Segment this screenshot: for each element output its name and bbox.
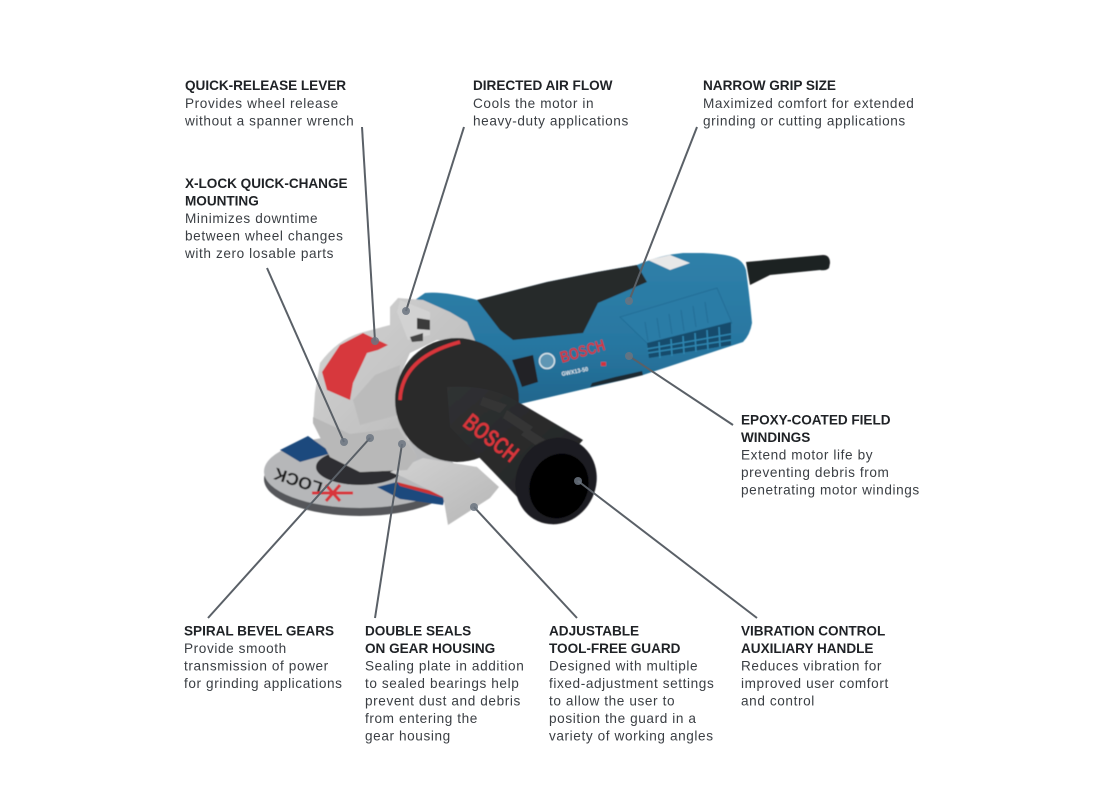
- leader: spiral bevel gears: [208, 438, 370, 618]
- callout: epoxy-coated field windings: Extend motor life by: [741, 448, 873, 462]
- motor housing: [415, 253, 752, 404]
- leader: epoxy windings: [629, 356, 733, 425]
- leader: x-lock: [267, 268, 344, 442]
- rubber grip: [477, 265, 647, 340]
- leader lines: [208, 127, 757, 618]
- callout: directed air flow: DIRECTED AIR FLOW: [473, 78, 613, 93]
- callout: adjustable guard: position the guard in a: [549, 711, 697, 726]
- handle lettering: BOSCH: [458, 409, 523, 468]
- callout: epoxy-coated field windings: preventing debris from: [741, 465, 889, 480]
- auxiliary handle: [395, 338, 611, 538]
- callout: quick-release lever: QUICK-RELEASE LEVER: [185, 78, 346, 93]
- housing logo and model: BOSCH: [558, 337, 607, 367]
- callout: double seals: DOUBLE SEALS: [365, 624, 471, 638]
- callout: narrow grip size: [703, 78, 914, 128]
- callout: spiral bevel gears: for grinding applications: [184, 676, 343, 691]
- leader end dots: [340, 297, 633, 511]
- callout: adjustable guard: variety of working angles: [549, 728, 714, 744]
- callout: x-lock mounting: MOUNTING: [185, 194, 259, 208]
- callout: narrow grip size: grinding or cutting applications: [703, 114, 906, 128]
- callout: spiral bevel gears: transmission of power: [184, 658, 329, 674]
- callout: vibration control handle: [741, 624, 889, 708]
- leader: quick-release lever: [362, 127, 375, 341]
- callout: narrow grip size: Maximized comfort for extended: [703, 96, 914, 111]
- callout: epoxy-coated field windings: EPOXY-COATED FIELD: [741, 412, 891, 428]
- callout: adjustable guard: ADJUSTABLE: [549, 624, 639, 638]
- leader: vibration handle: [578, 481, 757, 618]
- callout: adjustable guard: fixed-adjustment settings: [549, 676, 714, 691]
- leader: guard: [474, 507, 577, 618]
- callout: adjustable guard: Designed with multiple: [549, 658, 698, 674]
- disc wheel: [264, 435, 456, 516]
- callout: x-lock mounting: Minimizes downtime: [185, 211, 318, 226]
- gearbox shading: [353, 365, 400, 425]
- leader: directed air flow: [406, 127, 464, 311]
- callout: narrow grip size: NARROW GRIP SIZE: [703, 78, 836, 93]
- callout: double seals: gear housing: [365, 728, 451, 744]
- callout: vibration control handle: VIBRATION CONTROL: [741, 624, 885, 638]
- handle end cap: [501, 424, 611, 538]
- handle grip ridges: [480, 397, 550, 450]
- callout: x-lock mounting: with zero losable parts: [184, 246, 334, 261]
- callout: adjustable guard: [549, 624, 714, 744]
- callout: quick-release lever: [184, 78, 354, 128]
- callout: quick-release lever: Provides wheel release: [185, 96, 339, 111]
- callout: adjustable guard: to allow the user to: [549, 694, 675, 708]
- callout: x-lock mounting: between wheel changes: [185, 228, 343, 244]
- power cord: [746, 255, 830, 285]
- callout: adjustable guard: TOOL-FREE GUARD: [549, 641, 681, 656]
- housing logo and model: GWX13-50: [561, 367, 589, 378]
- housing underside shadow: [590, 371, 643, 387]
- callout: double seals: from entering the: [365, 711, 478, 726]
- disc lettering: LOCK: [271, 464, 325, 497]
- leader: double seals: [375, 444, 402, 618]
- gear head: [313, 298, 477, 472]
- callout: spiral bevel gears: SPIRAL BEVEL GEARS: [184, 624, 334, 638]
- callout: epoxy-coated field windings: [741, 412, 920, 498]
- product illustration: angle grinder: [264, 253, 830, 538]
- callout: directed air flow: [473, 78, 629, 128]
- callout: vibration control handle: Reduces vibration for: [741, 658, 882, 674]
- callout: quick-release lever: without a spanner wrench: [184, 114, 354, 128]
- callout: epoxy-coated field windings: penetrating motor windings: [741, 482, 920, 498]
- callout: x-lock mounting: [184, 176, 348, 261]
- callout: double seals: to sealed bearings help: [365, 676, 519, 691]
- callout: directed air flow: Cools the motor in: [473, 96, 594, 111]
- disc x logo: [312, 485, 353, 501]
- callout: vibration control handle: improved user comfort: [741, 676, 889, 691]
- housing logo and model: [540, 337, 607, 378]
- callout: vibration control handle: AUXILIARY HANDLE: [741, 641, 873, 656]
- callout: vibration control handle: and control: [741, 694, 815, 708]
- leader: narrow grip: [629, 127, 697, 301]
- label plate: [648, 255, 690, 270]
- callout: epoxy-coated field windings: WINDINGS: [741, 430, 810, 445]
- handle flange: [395, 338, 519, 462]
- callout: double seals: ON GEAR HOUSING: [365, 641, 495, 656]
- paddle switch: [512, 355, 538, 387]
- callout: spiral bevel gears: [184, 624, 343, 691]
- callout: directed air flow: heavy-duty applications: [473, 114, 629, 128]
- callout: spiral bevel gears: Provide smooth: [184, 641, 287, 656]
- callout: double seals: Sealing plate in addition: [365, 658, 524, 674]
- red quick-release lever: [322, 333, 388, 400]
- callout: double seals: [365, 624, 524, 744]
- guard: [390, 458, 499, 525]
- callout: x-lock mounting: X-LOCK QUICK-CHANGE: [185, 176, 348, 191]
- gearbox collar: [313, 417, 417, 472]
- callout: double seals: prevent dust and debris: [365, 694, 521, 708]
- motor vents: [620, 288, 732, 358]
- handle shaft: [447, 387, 583, 505]
- air vent: [397, 300, 430, 340]
